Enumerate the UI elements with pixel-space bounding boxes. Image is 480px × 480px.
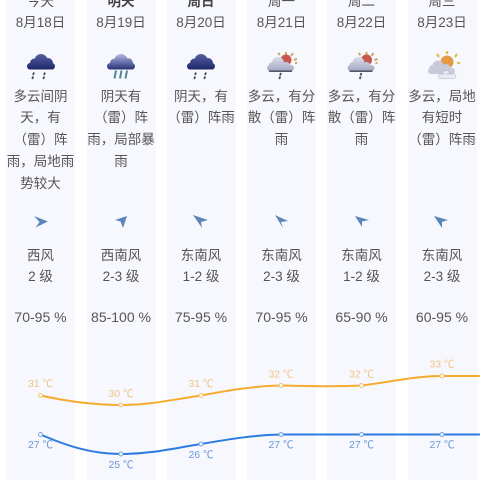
panel: day column 1: [6, 0, 75, 480]
weather icons: [27, 51, 460, 80]
humidity 5: 65-90 %: [335, 308, 388, 324]
description day 3: （雷）阵雨: [167, 110, 235, 125]
wind level 1: 2 级: [28, 269, 53, 284]
high temperature line: 32 ℃: [268, 368, 294, 380]
high temperature line: 32 ℃: [349, 368, 375, 380]
description day 4: [248, 88, 315, 147]
wind direction 3: 东南风: [181, 248, 221, 262]
description day 5: 散（雷）阵: [328, 110, 395, 125]
description day 5: 雨: [355, 132, 368, 147]
icon: sun and clouds day 6: [428, 51, 460, 78]
wind direction 4: 东南风: [261, 248, 302, 262]
date 1: 8月18日: [16, 15, 65, 30]
date 6: 8月23日: [417, 15, 467, 30]
description day 6: 有短时: [422, 110, 462, 125]
icon: wind arrow day 1: [34, 216, 48, 228]
panel: day column 2: [86, 0, 156, 480]
description day 4: 散（雷）阵: [248, 110, 315, 125]
humidity 1: 70-95 %: [14, 308, 67, 324]
low temperature line: 27 ℃: [28, 439, 54, 451]
panel: day column 3: [166, 0, 236, 480]
description day 1: 天，有: [20, 110, 61, 125]
description day 3: 阴天，有: [174, 88, 228, 104]
description day 1: 雨，局地雨: [7, 154, 74, 169]
description day 1: 多云间阴: [14, 88, 68, 104]
description day 6: [408, 88, 476, 147]
wind arrows: [34, 215, 448, 228]
panel: day column 5: [327, 0, 396, 480]
description day 2: [87, 88, 155, 169]
description day 4: 多云，有分: [248, 88, 315, 104]
humidity 3: 75-95 %: [175, 308, 227, 324]
description day 2: 雨: [114, 154, 128, 169]
description day 2: （雷）阵: [94, 110, 148, 125]
high temperature line: [28, 358, 480, 407]
wind direction 6: 东南风: [422, 248, 462, 262]
icon: sun cloud rain day 5: [348, 52, 378, 79]
icon: rain cloud day 3: [187, 54, 215, 79]
low temperature line: 27 ℃: [429, 439, 455, 451]
description day 2: 雨，局部暴: [87, 132, 155, 147]
wind level 4: 2-3 级: [263, 269, 300, 284]
description day 5: [328, 88, 395, 147]
high temperature line: 33 ℃: [429, 358, 455, 370]
icon: wind arrow day 6: [434, 216, 448, 228]
wind level 5: 1-2 级: [343, 269, 380, 284]
wind level 2: 2-3 级: [103, 269, 139, 284]
date 2: 8月19日: [96, 15, 146, 30]
humidity 2: 85-100 %: [91, 308, 151, 324]
low temperature line: [28, 432, 480, 471]
icon: sun cloud rain day 4: [267, 52, 297, 79]
low temperature line: 26 ℃: [188, 449, 214, 461]
wind direction 1: 西风: [27, 248, 54, 262]
panel: day column 4: [247, 0, 316, 480]
icon: wind arrow day 4: [275, 215, 288, 228]
humidity 4: 70-95 %: [255, 308, 308, 324]
wind level 6: 2-3 级: [424, 269, 460, 284]
icon: wind arrow day 2: [115, 216, 127, 228]
icon: heavy rain cloud day 2: [107, 54, 135, 78]
description day 2: 阴天有: [101, 88, 141, 104]
description day 1: 势较大: [20, 176, 61, 190]
high temperature line: 31 ℃: [28, 378, 54, 390]
low temperature line: 27 ℃: [349, 439, 375, 451]
description day 4: 雨: [275, 132, 288, 147]
description day 5: 多云，有分: [328, 88, 395, 104]
icon: wind arrow day 3: [193, 215, 208, 228]
icon: rain cloud day 1: [27, 54, 55, 79]
description day 6: （雷）阵雨: [408, 132, 476, 147]
date 4: 8月21日: [257, 15, 306, 30]
description day 6: 多云，局地: [408, 88, 476, 104]
high temperature line: 31 ℃: [188, 378, 214, 390]
wind level 3: 1-2 级: [183, 269, 219, 284]
wind direction 5: 东南风: [341, 248, 382, 262]
description day 1: [7, 88, 74, 190]
description day 3: [167, 88, 235, 125]
panel: day column 6: [408, 0, 476, 480]
wind direction 2: 西南风: [101, 248, 141, 262]
icon: wind arrow day 5: [355, 216, 369, 227]
date 3: 8月20日: [176, 15, 226, 30]
high temperature line: 30 ℃: [108, 388, 134, 400]
date 5: 8月22日: [337, 15, 386, 30]
humidity 6: 60-95 %: [416, 308, 468, 324]
description day 1: （雷）阵: [14, 132, 68, 147]
low temperature line: 25 ℃: [108, 459, 134, 471]
low temperature line: 27 ℃: [268, 439, 294, 451]
